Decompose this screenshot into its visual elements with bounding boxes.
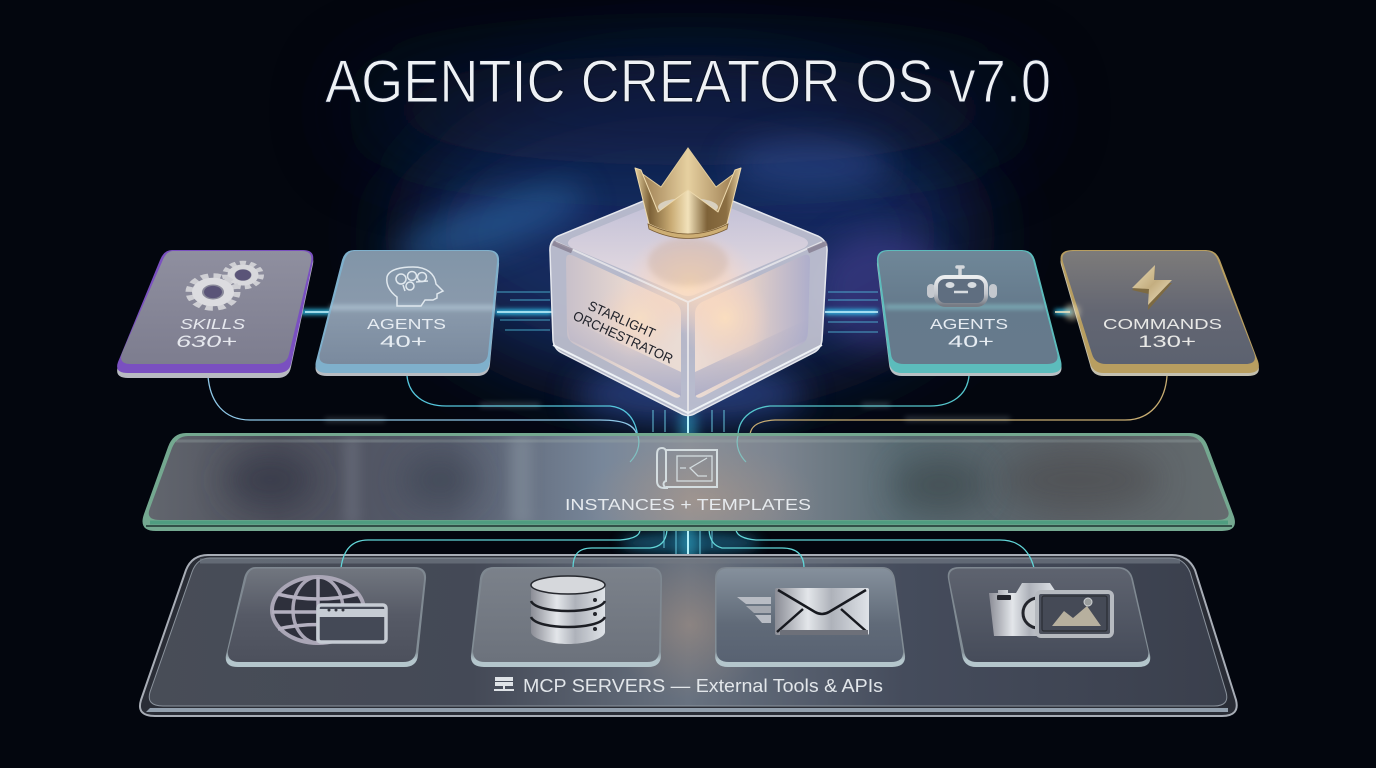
connector lines to tiles [341, 530, 1034, 568]
label: instances and templates: INSTANCES + TEMPLATES [565, 497, 811, 514]
connectors: horizontal glow links [300, 292, 1072, 332]
value: 630+: 630+ [176, 332, 237, 351]
icon: lightning bolt [1132, 265, 1172, 310]
icon: brain head [387, 267, 443, 306]
cube right face [695, 255, 810, 398]
cube label: ORCHESTRATOR [571, 308, 675, 367]
icon: camera and picture [989, 583, 1112, 636]
central vertical connector [653, 410, 724, 590]
icon: database [531, 576, 605, 644]
card: skills [117, 250, 313, 378]
icon: blueprint scroll [657, 448, 717, 488]
icon: winged envelope [737, 588, 869, 635]
crown reflection [648, 238, 728, 286]
icon: robot [927, 267, 997, 305]
label: skills: SKILLS [180, 316, 245, 333]
value: 40+: 40+ [948, 332, 994, 351]
card: agents right [877, 250, 1062, 376]
title: AGENTIC CREATOR OS v7.0 [325, 48, 1051, 115]
icon: globe and browser [272, 577, 386, 643]
card: commands [1060, 250, 1259, 376]
tile: mail [715, 567, 905, 667]
panel: MCP servers [140, 530, 1237, 716]
connector tails crossing the layer [630, 436, 746, 462]
cube left face [566, 255, 681, 398]
central cube: starlight orchestrator [550, 184, 827, 416]
panel: instances and templates [142, 433, 1235, 531]
label: agents: AGENTS [930, 316, 1008, 333]
value: 130+: 130+ [1138, 332, 1196, 351]
value: 40+: 40+ [380, 332, 427, 351]
label: commands: COMMANDS [1103, 316, 1222, 333]
cube label: STARLIGHT [586, 298, 658, 341]
icon: gold crown [635, 148, 741, 238]
cube top face [568, 192, 808, 296]
icon: server rack [494, 677, 514, 691]
tile: web browser [226, 567, 426, 667]
label: agents: AGENTS [367, 316, 446, 333]
tile: camera and image [948, 567, 1150, 667]
connectors: cards to instances layer [208, 376, 1167, 440]
icon: gears [189, 263, 261, 308]
tile: database [471, 567, 662, 667]
label: MCP servers: MCP SERVERS — External Tools & APIs [523, 676, 883, 696]
card: agents left [315, 250, 499, 376]
